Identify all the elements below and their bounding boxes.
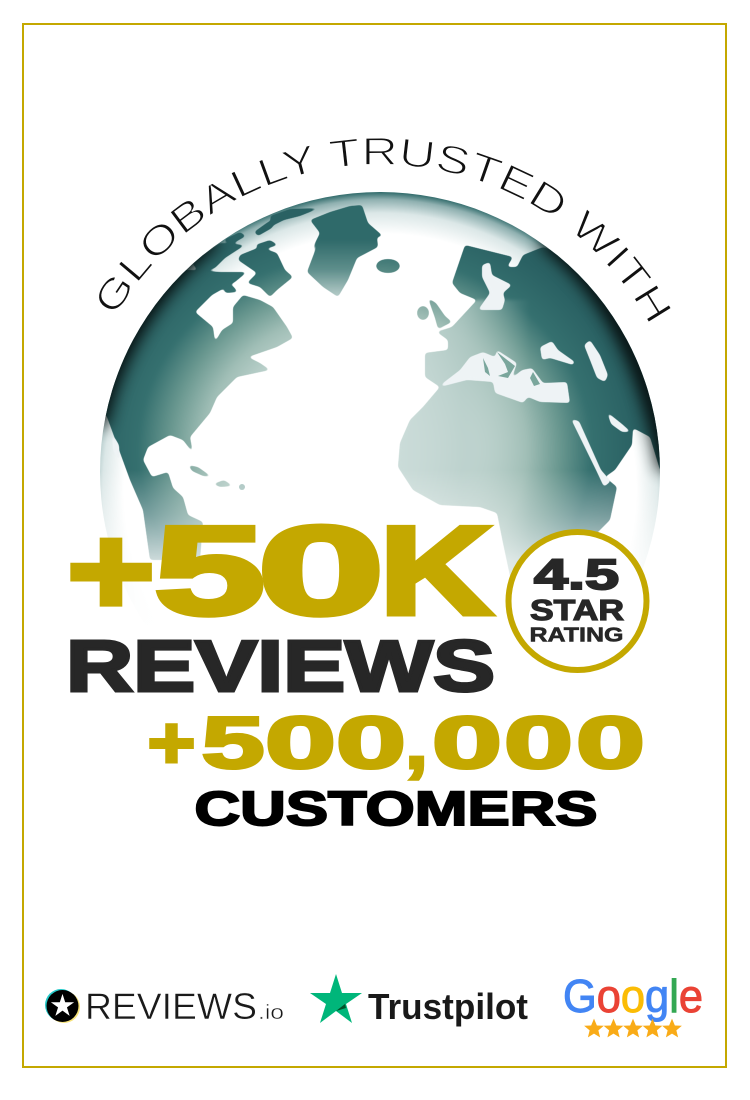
+50K figure: +	[67, 500, 155, 641]
land: Cuba and Caribbean islands	[190, 466, 230, 487]
globe bottom fade	[90, 470, 670, 630]
+500,000 figure: 0	[576, 703, 645, 784]
logo: Google	[563, 970, 703, 1037]
badge ring	[508, 532, 646, 670]
+500,000 figure: 0	[504, 703, 573, 784]
land: Iceland	[376, 259, 400, 273]
+50K figure: K	[379, 500, 492, 641]
badge rating: RATING	[530, 624, 624, 646]
logo: Trustpilot	[310, 974, 528, 1027]
land: Greenland	[307, 205, 383, 297]
trustpilot star	[310, 974, 362, 1023]
sea: Red Sea	[571, 419, 611, 487]
sea: Baltic	[478, 262, 512, 310]
google five stars	[584, 1019, 682, 1037]
badge value: 4.5	[534, 551, 619, 599]
+500,000 figure: ,	[405, 703, 428, 784]
sea: Persian Gulf	[607, 412, 631, 432]
+50K figure: 0	[258, 500, 384, 641]
seas	[112, 262, 631, 487]
+500,000 figure: 0	[265, 703, 336, 784]
+500,000 figure: 0	[336, 703, 406, 784]
sea: Black Sea	[540, 341, 575, 365]
+500,000 figure: +	[148, 703, 196, 784]
land: British Isles	[428, 298, 452, 329]
reviews label: REVIEWS	[66, 627, 495, 707]
badge star: STAR	[530, 595, 624, 627]
globe	[100, 192, 660, 576]
Italy and Mediterranean islands	[483, 352, 540, 386]
sea: Gulf of California	[112, 433, 120, 462]
land: Eurasia and Africa	[400, 246, 660, 576]
land: Arctic islands	[192, 208, 320, 297]
rating badge	[508, 532, 646, 670]
continents	[106, 205, 660, 576]
logo: REVIEWS.io	[45, 986, 284, 1027]
customers label: CUSTOMERS	[194, 783, 598, 836]
sea: Caspian	[584, 340, 608, 382]
globe bottom cover	[90, 630, 670, 760]
curved heading: GLOBALLY TRUSTED WITH	[99, 138, 670, 322]
reviews.io wordmark: .io	[258, 1002, 284, 1024]
+500,000 figure: 0	[432, 703, 502, 784]
Puerto Rico	[239, 484, 245, 490]
reviews.io wordmark: REVIEWS	[85, 986, 257, 1027]
+500,000 figure: 5	[202, 703, 264, 784]
left shadow	[96, 236, 212, 425]
+50K figure: 5	[154, 500, 265, 641]
sea: Mediterranean	[440, 350, 570, 403]
google wordmark: Google	[563, 970, 703, 1022]
land: North America	[106, 268, 292, 560]
globe sphere	[100, 192, 660, 752]
reviews.io icon	[45, 989, 80, 1023]
trustpilot wordmark: Trustpilot	[368, 986, 528, 1027]
land: Ireland	[417, 306, 429, 320]
land: West Africa and Iberia tint	[398, 298, 524, 508]
dark rim shadows	[96, 236, 668, 470]
right shadow	[545, 238, 668, 470]
